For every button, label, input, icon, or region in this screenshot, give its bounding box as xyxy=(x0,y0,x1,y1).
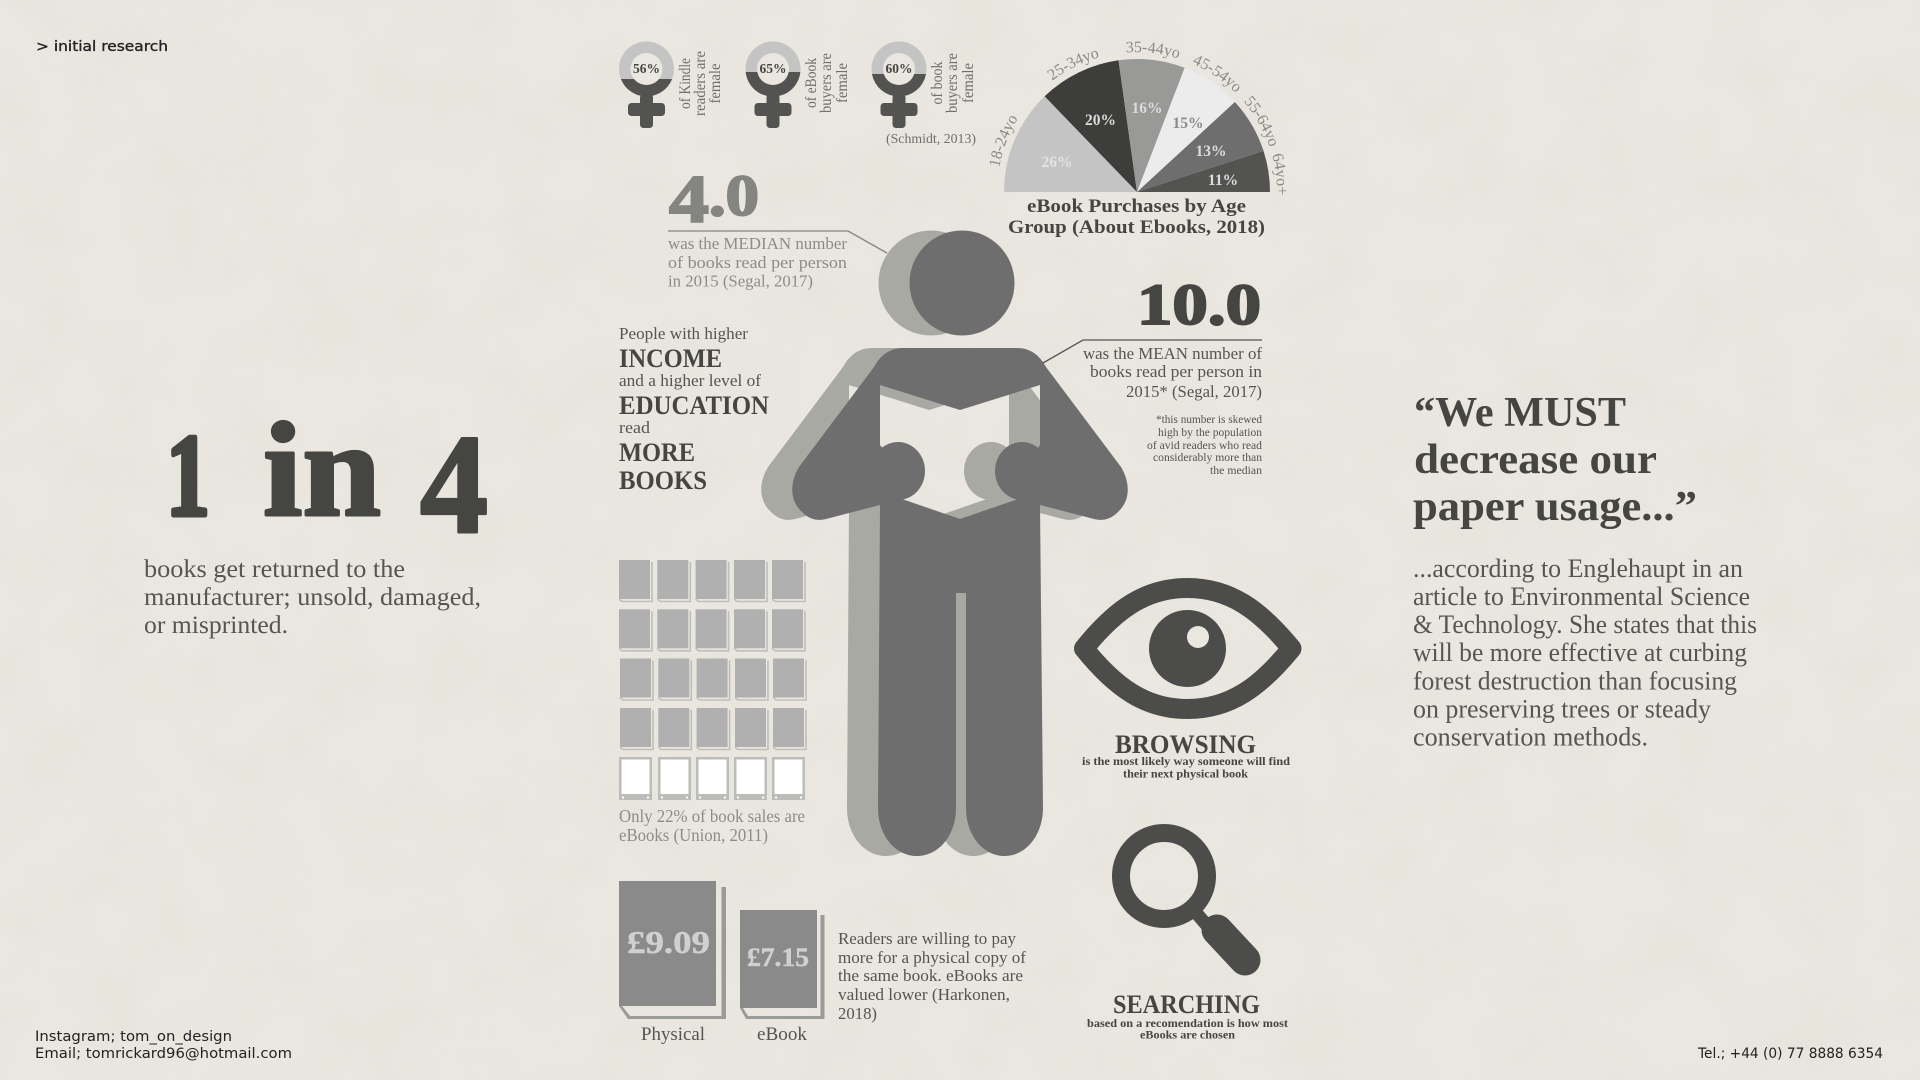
contact details: instagram and email: Instagram; tom_on_design xyxy=(35,1029,232,1045)
pie age labels: 55-64yo xyxy=(1244,96,1276,146)
text: 22 percent ebook sales: eBooks (Union, 2011) xyxy=(619,825,768,845)
big number: 1 in 4 xyxy=(166,396,488,563)
icon: physical book price xyxy=(619,881,726,1019)
pie percentage labels: 20% xyxy=(1085,112,1116,129)
text: books returned: or misprinted. xyxy=(144,612,288,639)
pie age labels: 35-44yo xyxy=(1126,42,1180,58)
icon: magnifying glass xyxy=(1121,833,1245,960)
text: of book buyers are female xyxy=(929,53,977,113)
icon: venus 65% ebook buyers xyxy=(746,42,800,128)
pie chart: ebook purchases by age xyxy=(990,42,1286,238)
figure front xyxy=(792,230,1128,856)
pie chart title xyxy=(1008,196,1265,238)
text: books returned xyxy=(144,556,481,639)
label: physical: Physical xyxy=(641,1024,705,1045)
median text xyxy=(668,234,848,290)
text: readers willing to pay: 2018) xyxy=(838,1004,877,1023)
text: of ebook buyers are female: female xyxy=(834,63,851,103)
median text: was the MEDIAN number xyxy=(668,234,848,253)
text: of ebook buyers are female xyxy=(803,53,851,113)
mean text: books read per person in xyxy=(1090,362,1262,381)
text: readers willing to pay xyxy=(838,929,1027,1023)
text block: income and education: EDUCATION xyxy=(619,391,769,420)
pictogram: physical and ebook sales grid xyxy=(619,560,806,800)
text: readers willing to pay: the same book. eBooks are xyxy=(838,966,1023,985)
quote heading: “We MUST xyxy=(1414,390,1626,436)
big number: 4.0 xyxy=(669,161,759,237)
quote body text: article to Environmental Science xyxy=(1413,582,1750,611)
icon: venus 56% kindle readers xyxy=(619,42,674,128)
text: of kindle readers are female: of Kindle xyxy=(677,58,694,109)
big number: 4.0: .0 xyxy=(709,163,759,228)
quote body text xyxy=(1413,554,1757,752)
callout: mean 10.0 xyxy=(1043,272,1263,477)
mean footnote: *this number is skewed xyxy=(1156,414,1262,426)
pie age labels: 64yo+ xyxy=(1272,154,1286,195)
text: books returned: books get returned to the xyxy=(144,556,405,583)
pie percentage labels: 11% xyxy=(1208,172,1238,189)
text: of ebook buyers are female: buyers are xyxy=(818,53,835,113)
pie percentage labels: 26% xyxy=(1042,154,1072,171)
icon: eye xyxy=(1084,588,1292,709)
text block: income and education: People with higher xyxy=(619,324,749,343)
figure shadow xyxy=(761,230,1097,856)
quote body text: ...according to Englehaupt in an xyxy=(1413,554,1743,583)
text: of book buyers are female: female xyxy=(960,63,977,103)
pie percentage labels xyxy=(1042,100,1238,189)
pie age labels: 18-24yo xyxy=(990,116,1017,166)
text: of ebook buyers are female: of eBook xyxy=(803,58,820,108)
text: browsing xyxy=(1082,730,1290,780)
contact details: instagram and email: Email; tomrickard96@hotmail.com xyxy=(35,1046,292,1062)
text: readers willing to pay: Readers are willing to pay xyxy=(838,929,1017,948)
text block: income and education: BOOKS xyxy=(619,466,707,495)
quote body text: on preserving trees or steady xyxy=(1413,694,1711,724)
quote body text: will be more effective at curbing xyxy=(1413,638,1747,667)
median text: in 2015 (Segal, 2017) xyxy=(668,272,813,290)
text: of book buyers are female: of book xyxy=(929,61,946,104)
quote heading: decrease our xyxy=(1414,437,1657,483)
quote body text: & Technology. She states that this xyxy=(1413,610,1757,639)
quote body text: conservation methods. xyxy=(1413,722,1648,752)
text: searching: eBooks are chosen xyxy=(1140,1030,1236,1042)
icon: venus 56% kindle readers: 56% xyxy=(633,61,660,76)
text: browsing: their next physical book xyxy=(1123,766,1248,780)
label: ebook: eBook xyxy=(757,1024,808,1045)
text: searching: SEARCHING xyxy=(1113,990,1260,1019)
mean footnote: the median xyxy=(1210,465,1262,477)
text: readers willing to pay: more for a physical copy of xyxy=(838,948,1027,967)
mean footnote: of avid readers who read xyxy=(1147,440,1262,452)
text: readers willing to pay: valued lower (Harkonen, xyxy=(838,985,1010,1004)
text: of kindle readers are female xyxy=(677,51,724,116)
contact details: instagram and email xyxy=(35,1029,292,1062)
text: of book buyers are female: buyers are xyxy=(944,53,961,113)
callout leader line xyxy=(1043,340,1262,363)
icon: ebook price: £7.15 xyxy=(747,943,809,972)
big number: 1 in 4: 1 xyxy=(166,410,210,541)
text: searching: based on a recomendation is how most xyxy=(1087,1018,1288,1030)
icon: venus 60% book buyers: 60% xyxy=(886,61,912,76)
big number: 10.0: 10.0 xyxy=(1137,272,1261,337)
text block: income and education: MORE xyxy=(619,438,695,467)
text block: income and education: INCOME xyxy=(619,344,722,373)
icon: physical book price: £9.09 xyxy=(627,924,710,960)
text: 22 percent ebook sales xyxy=(619,806,805,845)
section label: initial research: > initial research xyxy=(36,39,168,55)
citation: Schmidt 2013: (Schmidt, 2013) xyxy=(886,132,976,147)
quote body text: forest destruction than focusing xyxy=(1413,666,1737,696)
text: browsing: BROWSING xyxy=(1115,730,1256,759)
panel: paper usage quote xyxy=(1413,390,1757,752)
contact details: telephone: Tel.; +44 (0) 77 8888 6354 xyxy=(1697,1046,1883,1062)
quote heading: paper usage...” xyxy=(1413,484,1697,530)
pie age labels: 45-54yo xyxy=(1193,56,1240,92)
pie age labels xyxy=(990,42,1286,195)
callout leader line xyxy=(668,231,887,253)
big number: 1 in 4: in xyxy=(263,396,381,545)
text block: income and education xyxy=(619,324,769,495)
text: books returned: manufacturer; unsold, damaged, xyxy=(144,584,481,611)
pie chart title: Group (About Ebooks, 2018) xyxy=(1008,217,1265,238)
text block: income and education: and a higher level of xyxy=(619,371,762,390)
text: browsing: is the most likely way someone will find xyxy=(1082,754,1290,768)
pie chart title: eBook Purchases by Age xyxy=(1027,196,1246,217)
icon: venus 65% ebook buyers: 65% xyxy=(760,61,786,76)
mean footnote: considerably more than xyxy=(1153,452,1262,464)
text: searching xyxy=(1087,990,1288,1042)
mean footnote xyxy=(1147,414,1262,477)
mean text xyxy=(1083,344,1263,401)
mean text: 2015* (Segal, 2017) xyxy=(1126,382,1262,401)
panel: 1 in 4 statistic xyxy=(144,396,488,639)
pie percentage labels: 13% xyxy=(1196,143,1226,160)
pie percentage labels: 16% xyxy=(1132,100,1162,117)
pie percentage labels: 15% xyxy=(1172,115,1204,132)
big number: 4.0: 4 xyxy=(669,161,709,237)
person figure reading a book xyxy=(761,230,1128,856)
median text: of books read per person xyxy=(668,253,847,272)
text: of kindle readers are female: readers are xyxy=(692,51,709,116)
big number: 1 in 4: 4 xyxy=(420,405,488,563)
text: 22 percent ebook sales: Only 22% of book sales are xyxy=(619,806,805,826)
mean text: was the MEAN number of xyxy=(1083,344,1263,363)
pie age labels: 25-34yo xyxy=(1047,50,1098,80)
text: of kindle readers are female: female xyxy=(707,63,724,104)
callout: median 4.0 xyxy=(668,161,887,290)
icon: venus 60% book buyers xyxy=(872,42,926,128)
quote heading xyxy=(1413,390,1697,530)
icon: ebook price xyxy=(740,910,824,1019)
text block: income and education: read xyxy=(619,418,651,437)
mean footnote: high by the population xyxy=(1158,427,1262,439)
